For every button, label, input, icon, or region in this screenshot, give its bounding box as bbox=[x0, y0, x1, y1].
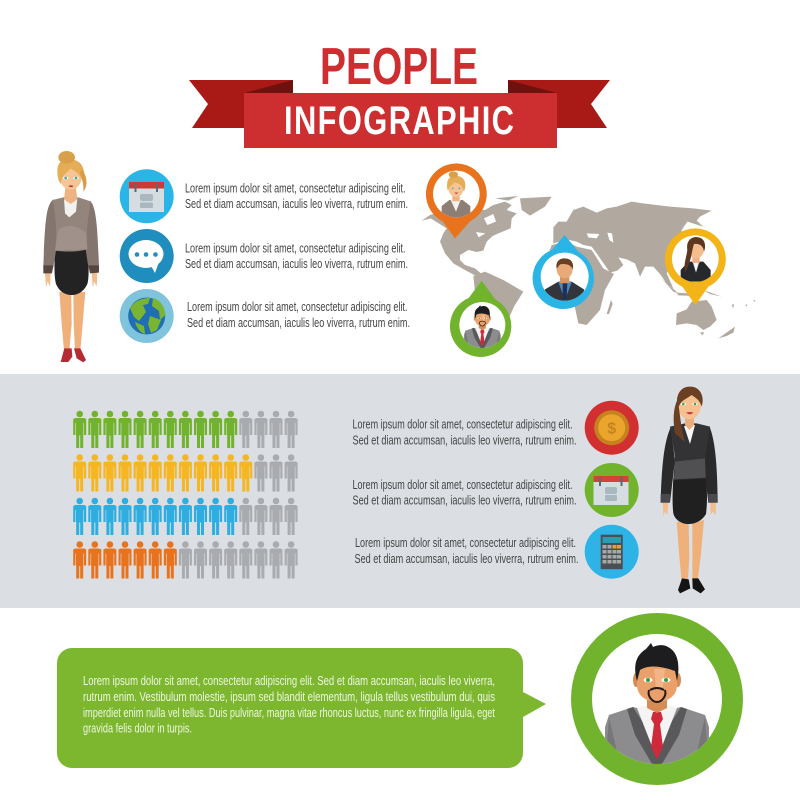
title: People: PEOPLE bbox=[320, 38, 478, 96]
text: row 2 band: Sed et diam accumsan, iaculis leo viverra, rutrum enim. bbox=[352, 492, 576, 508]
callout text: imperdiet enim nulla vel tellus. Duis pulvinar, magna vitae rhoncus luctus, nunc ex fringilla ligula, eget bbox=[83, 705, 495, 720]
callout text: Lorem ipsum dolor sit amet, consectetur adipiscing elit. Sed et diam accumsan, iaculis leo viverra, bbox=[83, 673, 495, 688]
callout text: rutrum enim. Vestibulum molestie, ipsum sed blandit elementum, ligula tellus vestibulum dui, quis bbox=[83, 689, 495, 704]
text: row 1 band: Lorem ipsum dolor sit amet, consectetur adipiscing elit. bbox=[352, 416, 572, 432]
icon: gold coin on red circle: $ bbox=[607, 420, 616, 438]
text: row 1 left: Lorem ipsum dolor sit amet, consectetur adipiscing elit. bbox=[185, 180, 406, 196]
text: row 3 left bbox=[187, 299, 410, 330]
text: row 2 band bbox=[352, 477, 576, 508]
text: row 3 band: Lorem ipsum dolor sit amet, consectetur adipiscing elit. bbox=[355, 535, 576, 550]
grey band panel bbox=[0, 374, 800, 608]
title: Infographic: INFOGRAPHIC bbox=[284, 98, 515, 143]
text: row 3 left: Sed et diam accumsan, iaculis leo viverra, rutrum enim. bbox=[187, 315, 410, 330]
figure: brunette woman bbox=[661, 387, 718, 593]
icon: gold coin on red circle bbox=[585, 401, 639, 455]
row: green 11 of 15 bbox=[73, 411, 298, 448]
pin: yellow with woman bbox=[665, 228, 726, 305]
text: row 1 left bbox=[185, 180, 408, 211]
icon: globe on light blue circle bbox=[120, 289, 174, 343]
ribbon front bbox=[244, 93, 557, 148]
map: continents bbox=[422, 196, 755, 338]
ribbon right tail bbox=[508, 80, 610, 128]
icon: calendar on blue circle bbox=[120, 169, 174, 223]
row: blue 11 of 15 bbox=[73, 498, 298, 535]
callout text bbox=[83, 673, 495, 736]
row: orange 7 of 15 bbox=[73, 541, 298, 578]
ribbon left tail bbox=[189, 80, 293, 128]
text: row 3 band bbox=[354, 535, 578, 566]
title banner bbox=[189, 38, 610, 148]
text: row 1 band: Sed et diam accumsan, iaculis leo viverra, rutrum enim. bbox=[352, 432, 576, 448]
text: row 2 left: Sed et diam accumsan, iaculis leo viverra, rutrum enim. bbox=[185, 256, 408, 271]
pictogram chart: people rows bbox=[73, 411, 298, 578]
pin: blue with man bbox=[533, 235, 594, 309]
icon: calendar on green circle bbox=[585, 463, 639, 517]
text: row 2 band: Lorem ipsum dolor sit amet, consectetur adipiscing elit. bbox=[352, 477, 572, 492]
text: row 2 left bbox=[185, 240, 408, 271]
callout: green speech bubble bbox=[57, 648, 546, 768]
icon: speech bubble on blue circle bbox=[120, 229, 174, 283]
text: row 3 band: Sed et diam accumsan, iaculis leo viverra, rutrum enim. bbox=[354, 551, 578, 566]
text: row 2 left: Lorem ipsum dolor sit amet, consectetur adipiscing elit. bbox=[185, 240, 406, 256]
portrait: man in green ring bbox=[571, 613, 743, 785]
icon: calculator on blue circle bbox=[585, 525, 639, 579]
callout text: gravida felis dolor in turpis. bbox=[83, 720, 192, 736]
text: row 1 left: Sed et diam accumsan, iaculis leo viverra, rutrum enim. bbox=[185, 196, 408, 211]
world map with pins bbox=[422, 196, 755, 338]
row: yellow 12 of 15 bbox=[73, 454, 298, 492]
pin: orange with blonde woman bbox=[426, 163, 487, 238]
text: row 1 band bbox=[352, 416, 576, 448]
text: row 3 left: Lorem ipsum dolor sit amet, consectetur adipiscing elit. bbox=[187, 299, 408, 314]
pin: green with man bbox=[450, 281, 511, 357]
figure: blonde woman bbox=[43, 151, 99, 362]
